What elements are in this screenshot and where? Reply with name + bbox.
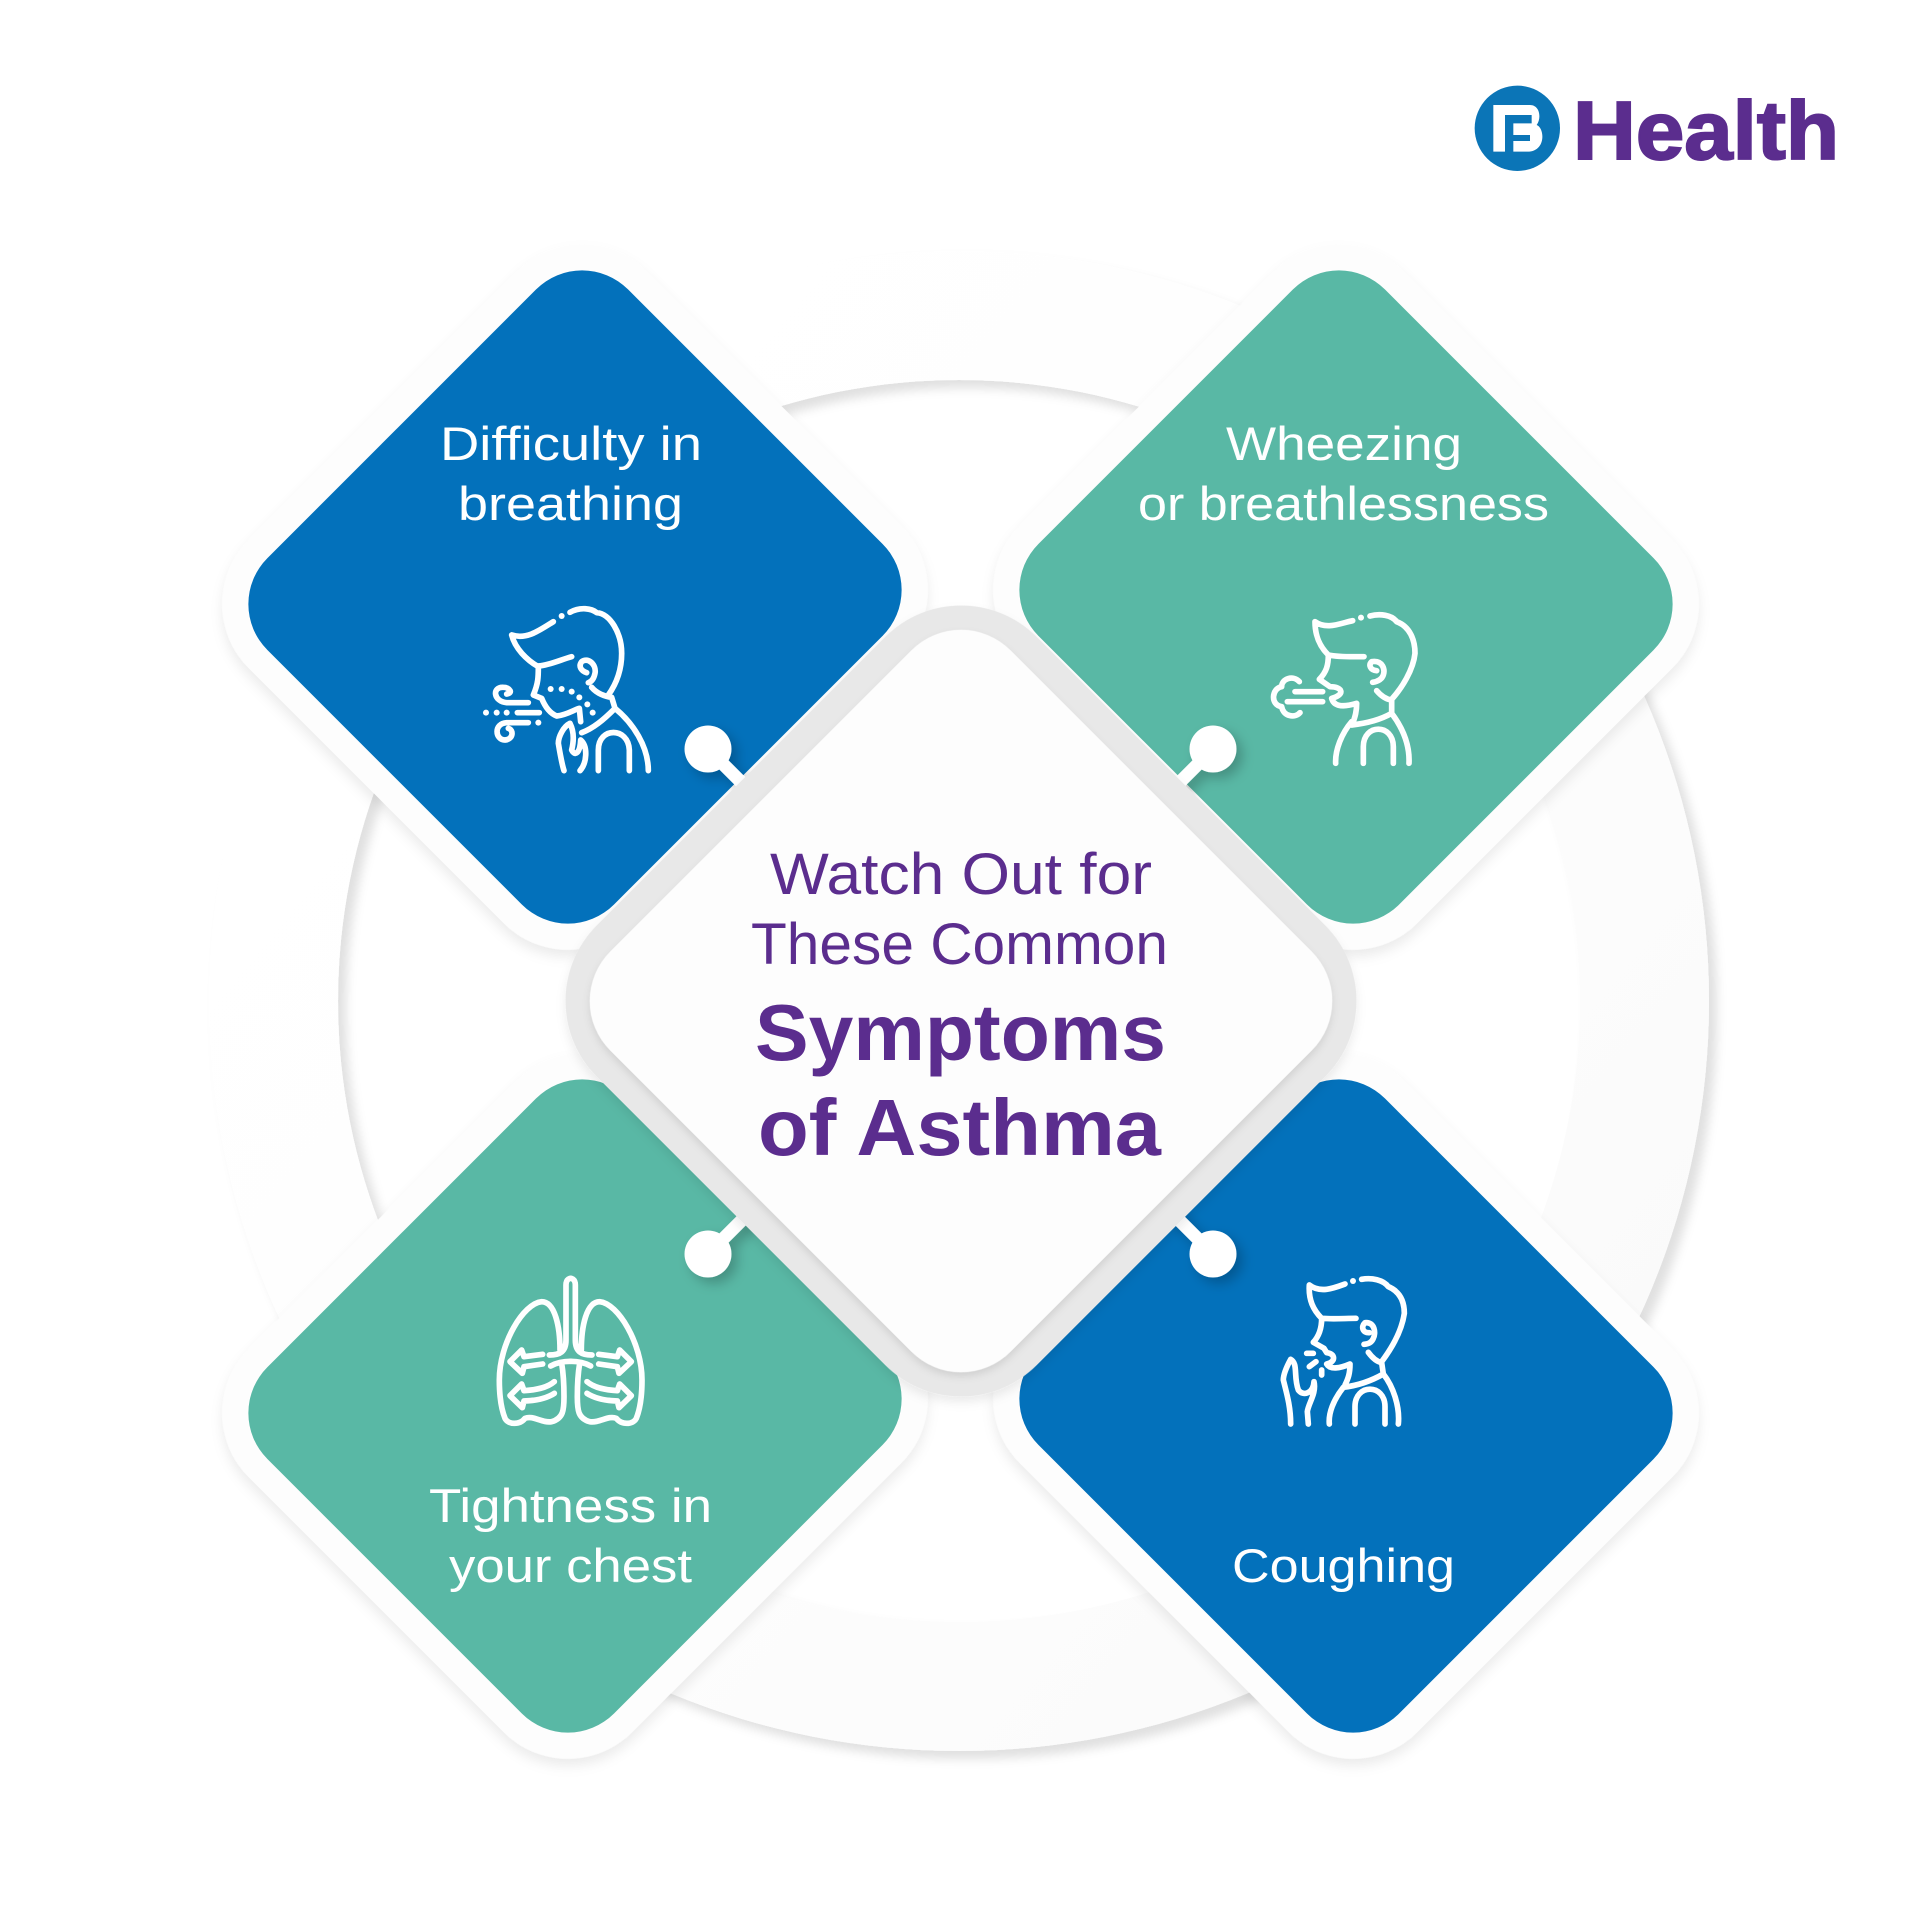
background ring bbox=[209, 251, 1709, 1751]
connector: top right bbox=[1171, 726, 1236, 791]
label: tightness in your chest bbox=[429, 1479, 712, 1592]
panel: wheezing or breathlessness bbox=[956, 207, 1736, 987]
label: difficulty in breathing: Difficulty in bbox=[440, 417, 702, 470]
label: wheezing or breathlessness: or breathlessness bbox=[1138, 477, 1549, 530]
icon: person coughing bbox=[1283, 1278, 1404, 1424]
label: difficulty in breathing bbox=[440, 417, 702, 530]
label: difficulty in breathing: breathing bbox=[458, 477, 683, 530]
title: of Asthma bbox=[758, 1083, 1162, 1172]
label: wheezing or breathlessness: Wheezing bbox=[1226, 417, 1462, 470]
panel: coughing bbox=[956, 1016, 1736, 1796]
title bbox=[751, 842, 1168, 1172]
logo bbox=[1475, 84, 1839, 177]
label: coughing: Coughing bbox=[1232, 1539, 1455, 1592]
panel: difficulty in breathing bbox=[185, 207, 965, 987]
label: tightness in your chest: your chest bbox=[449, 1539, 692, 1592]
panel: tightness in your chest bbox=[185, 1016, 965, 1796]
title: Symptoms bbox=[755, 988, 1166, 1077]
label: tightness in your chest: Tightness in bbox=[429, 1479, 712, 1532]
logo icon bbox=[1475, 86, 1560, 171]
title: These Common bbox=[751, 912, 1168, 977]
label: wheezing or breathlessness bbox=[1138, 417, 1549, 530]
panel: central diamond bbox=[521, 561, 1401, 1441]
icon: lungs with arrows bbox=[499, 1278, 642, 1423]
connector: top left bbox=[684, 726, 750, 791]
title: Watch Out for bbox=[770, 842, 1152, 907]
connector: bottom right bbox=[1171, 1212, 1236, 1278]
logo wordmark: Health bbox=[1573, 84, 1839, 177]
icon: person wheezing bbox=[1274, 615, 1415, 763]
icon: person breathing with difficulty bbox=[483, 609, 648, 771]
connector: bottom left bbox=[684, 1212, 750, 1278]
